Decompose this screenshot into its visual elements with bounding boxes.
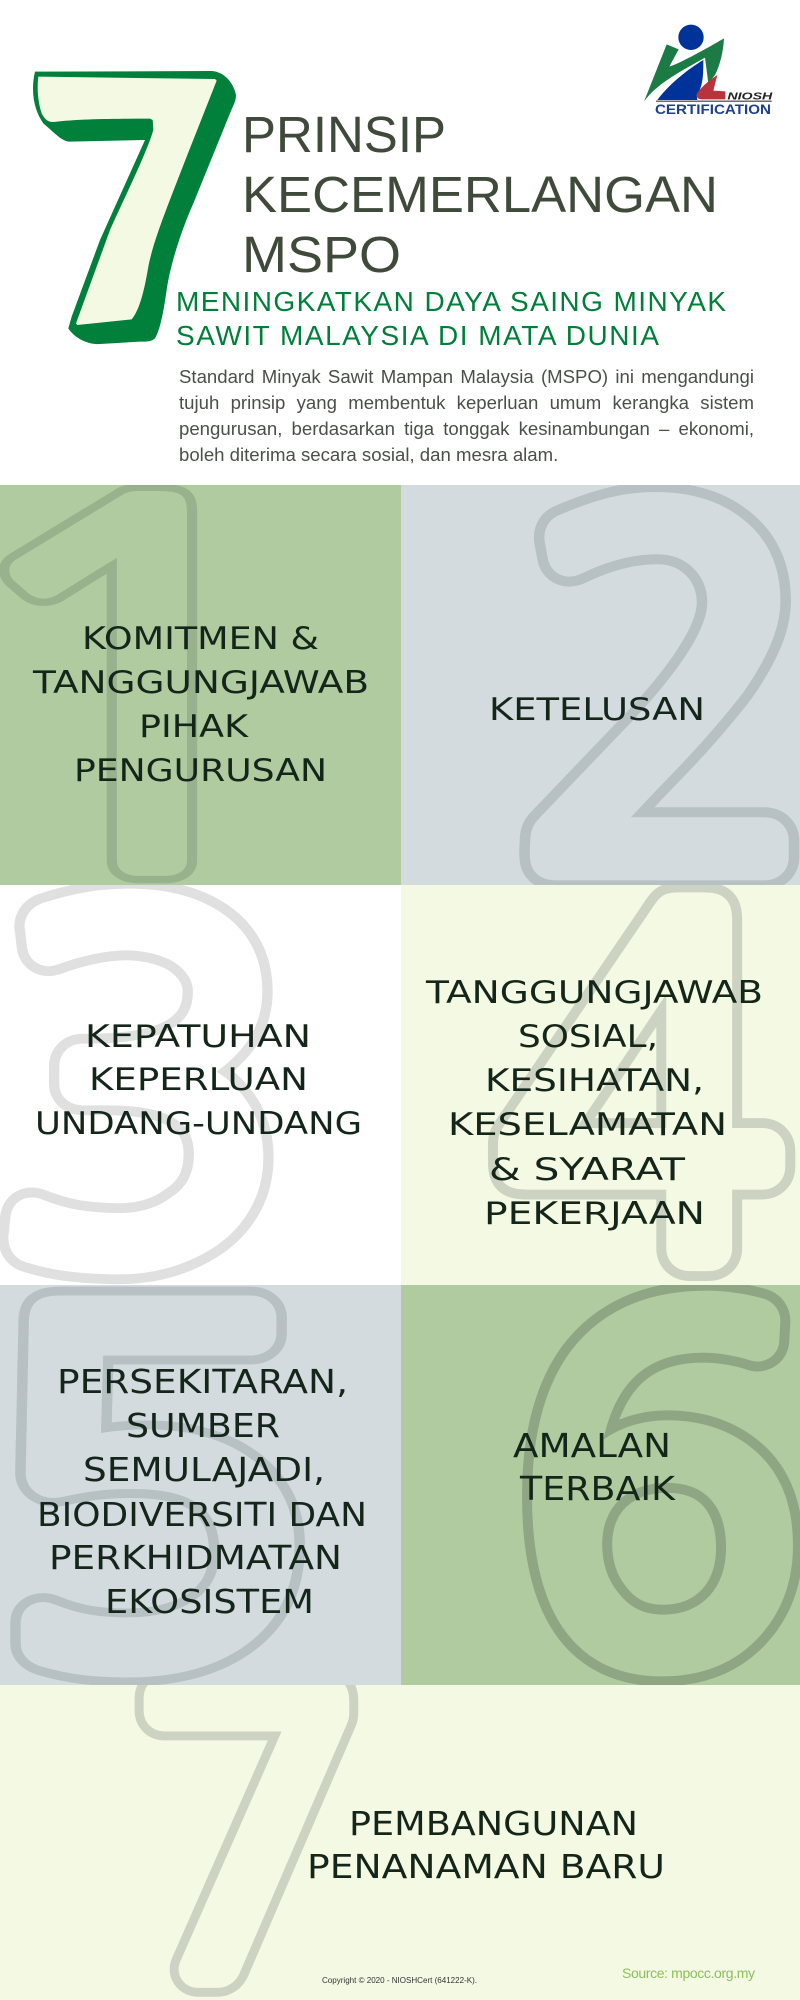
- label: tanggungjawab sosial: TANGGUNGJAWAB: [425, 975, 763, 1011]
- panel 1: komitmen: [0, 444, 401, 937]
- panel 2: ketelusan: [401, 459, 800, 930]
- label: komitmen: KOMITMEN &: [82, 621, 319, 657]
- label: komitmen: [32, 621, 369, 789]
- label: ketelusan: KETELUSAN: [489, 692, 705, 728]
- label: persekitaran: EKOSISTEM: [105, 1582, 314, 1621]
- heading: title: KECEMERLANGAN: [242, 166, 718, 223]
- label: amalan terbaik: [513, 1426, 676, 1508]
- label: persekitaran: [37, 1362, 367, 1621]
- label: persekitaran: SEMULAJADI,: [83, 1450, 325, 1489]
- numeral 6: 6: [517, 1260, 800, 1722]
- label: kepatuhan: KEPATUHAN: [85, 1019, 311, 1055]
- icon: large green number 7: [33, 71, 236, 344]
- label: tanggungjawab sosial: & SYARAT: [489, 1152, 686, 1188]
- heading: title: PRINSIP: [242, 106, 446, 163]
- icon: NIOSH Certification logo: NIOSH: [727, 91, 773, 102]
- heading: title: [242, 106, 718, 283]
- label: amalan terbaik: AMALAN: [513, 1426, 671, 1465]
- label: kepatuhan: [35, 1019, 362, 1142]
- intro paragraph: tujuh prinsip yang membentuk keperluan umum kerangka sistem: [179, 392, 754, 413]
- label: persekitaran: PERSEKITARAN,: [57, 1362, 348, 1401]
- label: pembangunan penanaman baru: PENANAMAN BARU: [307, 1847, 665, 1886]
- numeral 4: 4: [499, 858, 784, 1320]
- label: tanggungjawab sosial: [425, 975, 763, 1232]
- label: persekitaran: BIODIVERSITI DAN: [37, 1495, 367, 1534]
- intro paragraph: boleh diterima secara sosial, dan mesra alam.: [179, 444, 558, 465]
- heading: subtitle: MENINGKATKAN DAYA SAING MINYAK: [176, 286, 726, 317]
- panel 5: persekitaran: [0, 1260, 401, 1725]
- label: persekitaran: PERKHIDMATAN: [49, 1538, 342, 1577]
- heading: subtitle: [176, 286, 726, 351]
- numeral 3: 3: [0, 858, 288, 1320]
- label: tanggungjawab sosial: KESIHATAN,: [485, 1063, 704, 1099]
- intro paragraph: [179, 366, 754, 465]
- icon: NIOSH Certification logo: CERTIFICATION: [655, 102, 771, 117]
- label: pembangunan penanaman baru: [307, 1804, 665, 1886]
- label: tanggungjawab sosial: SOSIAL,: [518, 1019, 658, 1055]
- numeral 4: 4: [499, 858, 784, 1320]
- label: kepatuhan: KEPERLUAN: [89, 1062, 308, 1098]
- label: komitmen: TANGGUNGJAWAB: [32, 665, 369, 701]
- label: amalan terbaik: TERBAIK: [519, 1469, 676, 1508]
- panel 6: amalan terbaik: [401, 1260, 800, 1722]
- panel 4: tanggungjawab sosial: [401, 858, 800, 1320]
- numeral 6: 6: [517, 1260, 800, 1722]
- label: tanggungjawab sosial: PEKERJAAN: [484, 1196, 705, 1232]
- source note: Source: mpocc.org.my: [622, 1965, 755, 1981]
- intro paragraph: Standard Minyak Sawit Mampan Malaysia (MSPO) ini mengandungi: [179, 366, 754, 387]
- numeral 3: 3: [0, 858, 288, 1320]
- label: kepatuhan: UNDANG-UNDANG: [35, 1106, 362, 1142]
- label: komitmen: PIHAK: [139, 709, 249, 745]
- label: pembangunan penanaman baru: PEMBANGUNAN: [349, 1804, 638, 1843]
- label: persekitaran: SUMBER: [126, 1406, 280, 1445]
- icon: NIOSH Certification logo: [644, 25, 773, 117]
- label: tanggungjawab sosial: KESELAMATAN: [448, 1107, 727, 1143]
- intro paragraph: pengurusan, berdasarkan tiga tonggak kesinambungan – ekonomi,: [179, 418, 754, 439]
- heading: subtitle: SAWIT MALAYSIA DI MATA DUNIA: [176, 320, 659, 351]
- copyright note: Copyright © 2020 - NIOSHCert (641222-K).: [322, 1976, 477, 1985]
- heading: title: MSPO: [242, 226, 401, 283]
- panel 7: pembangunan penanaman baru: [0, 1651, 800, 2000]
- panel 3: kepatuhan: [0, 858, 401, 1320]
- label: komitmen: PENGURUSAN: [74, 753, 327, 789]
